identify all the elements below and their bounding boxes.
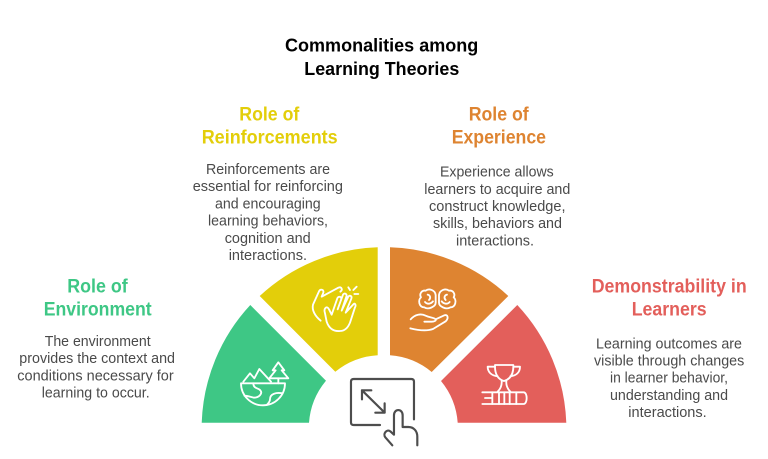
- text: environment description: conditions necessary for: [17, 368, 174, 384]
- text: reinforcements description: essential for reinforcing: [193, 179, 343, 195]
- text: demonstrability description: visible through changes: [594, 354, 744, 370]
- text: experience description: [424, 165, 570, 249]
- text: demonstrability description: Learning outcomes are: [596, 336, 742, 352]
- heading: role of reinforcements: Role of: [239, 104, 300, 126]
- segment: red demonstrability: [441, 305, 566, 423]
- heading: role of environment: [44, 276, 152, 320]
- text: demonstrability description: [594, 336, 744, 421]
- heading: demonstrability in learners: Learners: [632, 298, 707, 320]
- icon: earth with mountains and tree: [241, 362, 288, 405]
- text: demonstrability description: interactions.: [628, 405, 707, 421]
- text: demonstrability description: understanding and: [610, 388, 728, 404]
- text: reinforcements description: Reinforcements are: [206, 162, 330, 178]
- heading: role of environment: Role of: [67, 276, 128, 298]
- segment: green environment: [202, 305, 326, 423]
- heading: role of experience: Role of: [469, 104, 529, 126]
- title: [285, 36, 478, 79]
- text: experience description: learners to acquire and: [424, 182, 570, 198]
- icon: brain over open hand: [410, 289, 455, 330]
- heading: demonstrability in learners: Demonstrability in: [592, 276, 747, 298]
- text: reinforcements description: interactions.: [229, 248, 307, 264]
- text: environment description: learning to occur.: [42, 386, 150, 402]
- segment: yellow reinforcements: [260, 247, 378, 372]
- heading: role of reinforcements: [202, 104, 338, 148]
- text: reinforcements description: learning behaviors,: [208, 214, 328, 230]
- text: environment description: The environment: [45, 334, 151, 350]
- icon: resize on touch screen: [351, 379, 417, 445]
- heading: role of experience: [452, 104, 546, 148]
- heading: role of environment: Environment: [44, 298, 152, 320]
- heading: role of experience: Experience: [452, 126, 546, 148]
- text: environment description: provides the context and: [19, 351, 175, 367]
- panel: role of reinforcements text: [193, 104, 343, 264]
- icon: clapping hands: [313, 287, 358, 331]
- text: experience description: construct knowledge,: [429, 199, 566, 215]
- icon: trophy on book: [482, 365, 527, 404]
- text: experience description: skills, behaviors and: [433, 216, 562, 232]
- text: reinforcements description: cognition and: [225, 231, 311, 247]
- text: experience description: interactions.: [456, 233, 534, 249]
- text: environment description: [17, 334, 175, 402]
- text: reinforcements description: [193, 162, 343, 264]
- segment: orange experience: [390, 247, 508, 372]
- title: Learning Theories: [304, 59, 459, 79]
- title: Commonalities among: [285, 36, 478, 56]
- heading: role of reinforcements: Reinforcements: [202, 126, 338, 148]
- panel: demonstrability in learners text: [592, 276, 747, 421]
- text: reinforcements description: and encouraging: [215, 196, 321, 212]
- text: demonstrability description: in learner behavior,: [610, 371, 728, 387]
- heading: demonstrability in learners: [592, 276, 747, 320]
- text: experience description: Experience allows: [440, 165, 554, 181]
- panel: role of experience text: [424, 104, 570, 249]
- panel: role of environment text: [17, 276, 175, 402]
